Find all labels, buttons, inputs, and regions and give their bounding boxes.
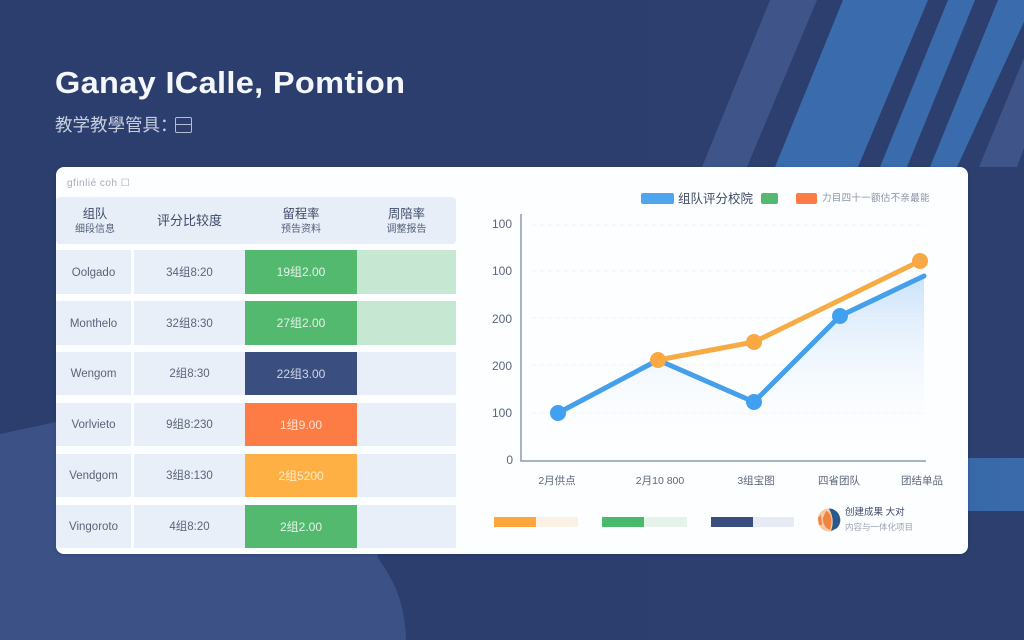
row 2 value: 27组2.00 (277, 316, 325, 330)
table row 1 (56, 250, 456, 294)
row 5 value (245, 454, 357, 497)
orange series (650, 253, 928, 368)
table row 2 (56, 301, 456, 345)
row 3 name (56, 352, 131, 395)
navy fill (711, 517, 753, 527)
row 5 name (56, 454, 131, 497)
row 1 name (56, 250, 131, 294)
x axis labels: 2月10 800 (636, 475, 684, 487)
row 6 name: Vingoroto (69, 521, 118, 533)
title: Ganay ICalle, Pomtion (55, 65, 405, 100)
y axis labels: 100 (492, 264, 512, 278)
legend swatch: green (761, 193, 778, 204)
footer note (845, 506, 913, 532)
row 1 score: 34组8:20 (166, 267, 213, 279)
y axis labels: 200 (492, 312, 512, 326)
row 2 name: Monthelo (70, 318, 117, 330)
amber fill (494, 517, 536, 527)
green fill (602, 517, 644, 527)
row 2 bar remainder (357, 301, 456, 345)
subtitle: 教学教學管具： (55, 115, 178, 135)
row 6 value: 2组2.00 (280, 520, 322, 534)
row 5 score (134, 454, 245, 497)
row 4 value (245, 403, 357, 446)
progress bar: navy (711, 517, 794, 527)
table header background (56, 197, 456, 244)
panel: dashboard card (56, 167, 968, 554)
legend swatch: blue (641, 193, 674, 204)
row 4 score (134, 403, 245, 446)
table row 4 (56, 403, 456, 446)
row 3 value: 22组3.00 (277, 366, 325, 380)
row 2 score (134, 301, 245, 345)
table header: rate (386, 206, 426, 234)
footer note detail: 内容与一体化项目 (845, 522, 913, 532)
x axis labels: 团结单品 (901, 474, 943, 487)
row 1 score (134, 250, 245, 294)
table header: retention: 留程率 (283, 206, 319, 220)
row 1 value (245, 250, 357, 294)
table row 3 (56, 352, 456, 395)
table header: team (75, 206, 115, 234)
row 6 value (245, 505, 357, 548)
row 4 bar remainder (357, 403, 456, 446)
row 1 bar remainder (357, 250, 456, 294)
footer note title: 创建成果 大对 (845, 507, 905, 518)
progress bar: amber (494, 517, 578, 527)
axes (521, 214, 926, 461)
area under blue line (558, 276, 924, 450)
x axis labels: 四省团队 (818, 474, 860, 487)
blue series (550, 276, 924, 421)
table header: retention (281, 206, 321, 234)
row 4 score: 9组8:230 (166, 419, 213, 431)
legend swatch: orange (796, 193, 817, 204)
progress bar: green (602, 517, 687, 527)
y axis labels: 100 (492, 217, 512, 231)
row 5 value: 2组5200 (278, 468, 324, 482)
row 1 value: 19组2.00 (277, 265, 325, 279)
y axis labels (492, 217, 513, 467)
table row 5 (56, 454, 456, 497)
y axis labels: 0 (506, 453, 513, 467)
row 4 value: 1组9.00 (280, 418, 322, 432)
table caption: gfinlié coh ☐ (67, 178, 130, 189)
row 5 name: Vendgom (69, 470, 118, 482)
grid lines (532, 225, 925, 413)
row 5 bar remainder (357, 454, 456, 497)
line chart (492, 214, 943, 487)
table header: team: 组队 (83, 206, 107, 220)
table header: team: 细段信息 (75, 224, 115, 234)
y axis labels: 100 (492, 406, 512, 420)
x axis labels: 3组宝图 (737, 474, 775, 487)
row 3 name: Wengom (71, 368, 116, 380)
table row 6 (56, 505, 456, 548)
row 6 bar remainder (357, 505, 456, 548)
table header: retention: 预告资料 (281, 224, 321, 234)
x axis labels: 2月供点 (538, 474, 576, 487)
icon: logo badge (818, 508, 840, 532)
row 6 score (134, 505, 245, 548)
row 2 score: 32组8:30 (166, 318, 213, 330)
row 1 name: Oolgado (72, 267, 115, 279)
row 3 score: 2组8:30 (169, 368, 210, 380)
row 4 name: Vorlvieto (71, 419, 116, 431)
table header: score: 评分比较度 (157, 212, 222, 228)
y axis labels: 200 (492, 359, 512, 373)
row 3 score (134, 352, 245, 395)
table header: rate: 周陪率 (388, 206, 425, 220)
row 2 name (56, 301, 131, 345)
legend label: team score: 组队评分校院 (678, 192, 753, 206)
row 6 score: 4组8:20 (169, 521, 210, 533)
row 6 name (56, 505, 131, 548)
row 3 bar remainder (357, 352, 456, 395)
row 5 score: 3组8:130 (166, 470, 213, 482)
x axis labels (538, 474, 943, 487)
row 4 name (56, 403, 131, 446)
row 2 value (245, 301, 357, 345)
legend label: comparison: 力目四十一额估不亲最能 (822, 193, 930, 204)
row 3 value (245, 352, 357, 395)
chart legend (641, 192, 930, 206)
table header: rate: 调整报告 (386, 224, 426, 234)
